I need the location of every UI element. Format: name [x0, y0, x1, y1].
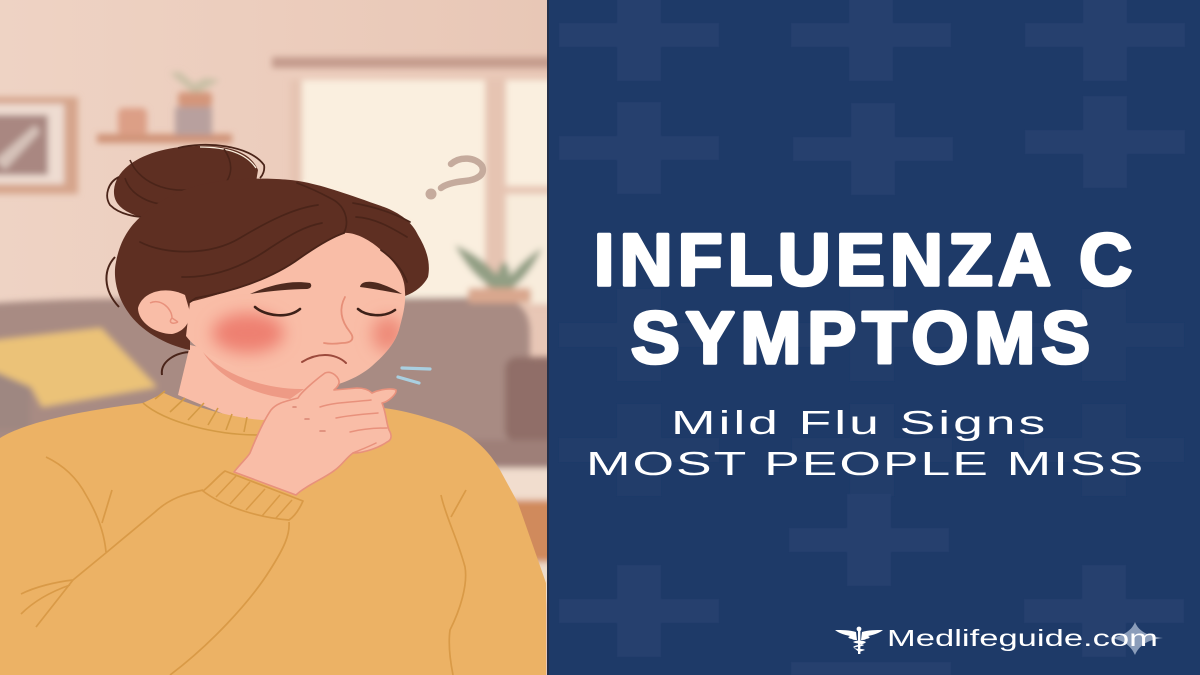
sofa — [0, 297, 570, 470]
cross pattern — [559, 0, 1185, 675]
nose — [324, 297, 352, 344]
back hair — [115, 179, 429, 350]
title — [594, 220, 1132, 379]
logo: Medlifeguide.com — [835, 622, 1163, 655]
plant — [455, 245, 542, 303]
icon: caduceus — [835, 627, 883, 654]
hand — [234, 372, 396, 495]
woman figure — [0, 145, 546, 675]
subtitle: Mild Flu Signs — [671, 405, 1045, 441]
panel: illustration — [0, 0, 570, 675]
icon: star sparkle — [1110, 622, 1163, 655]
question mark — [426, 159, 483, 200]
neck — [178, 345, 306, 420]
wall — [0, 0, 547, 675]
curtain rod — [272, 57, 562, 68]
eyes — [255, 307, 395, 315]
stray hair strands — [106, 257, 192, 375]
sleeve and folds — [21, 457, 466, 675]
picture frame — [0, 97, 78, 194]
hair strands — [140, 180, 416, 302]
bun — [107, 145, 264, 217]
eyebrows — [250, 282, 402, 294]
blurred room background — [0, 57, 570, 602]
cough droplets — [398, 368, 430, 383]
yellow pillow — [0, 328, 157, 407]
face — [186, 233, 405, 388]
subtitle — [586, 405, 1143, 482]
ear — [138, 290, 190, 334]
subtitle: MOST PEOPLE MISS — [586, 446, 1143, 482]
cheek blush — [212, 313, 404, 353]
mouth — [302, 355, 346, 363]
cuff — [203, 471, 303, 520]
floor — [440, 468, 570, 602]
neck shadow — [203, 352, 304, 399]
sweater — [0, 391, 546, 675]
window — [290, 80, 558, 310]
website text: Medlifeguide.com — [887, 626, 1158, 651]
title: SYMPTOMS — [631, 298, 1090, 379]
collar — [143, 391, 258, 435]
title: INFLUENZA C — [594, 220, 1132, 301]
panel: navy title background — [547, 0, 1200, 675]
shelf with vases — [97, 72, 232, 143]
